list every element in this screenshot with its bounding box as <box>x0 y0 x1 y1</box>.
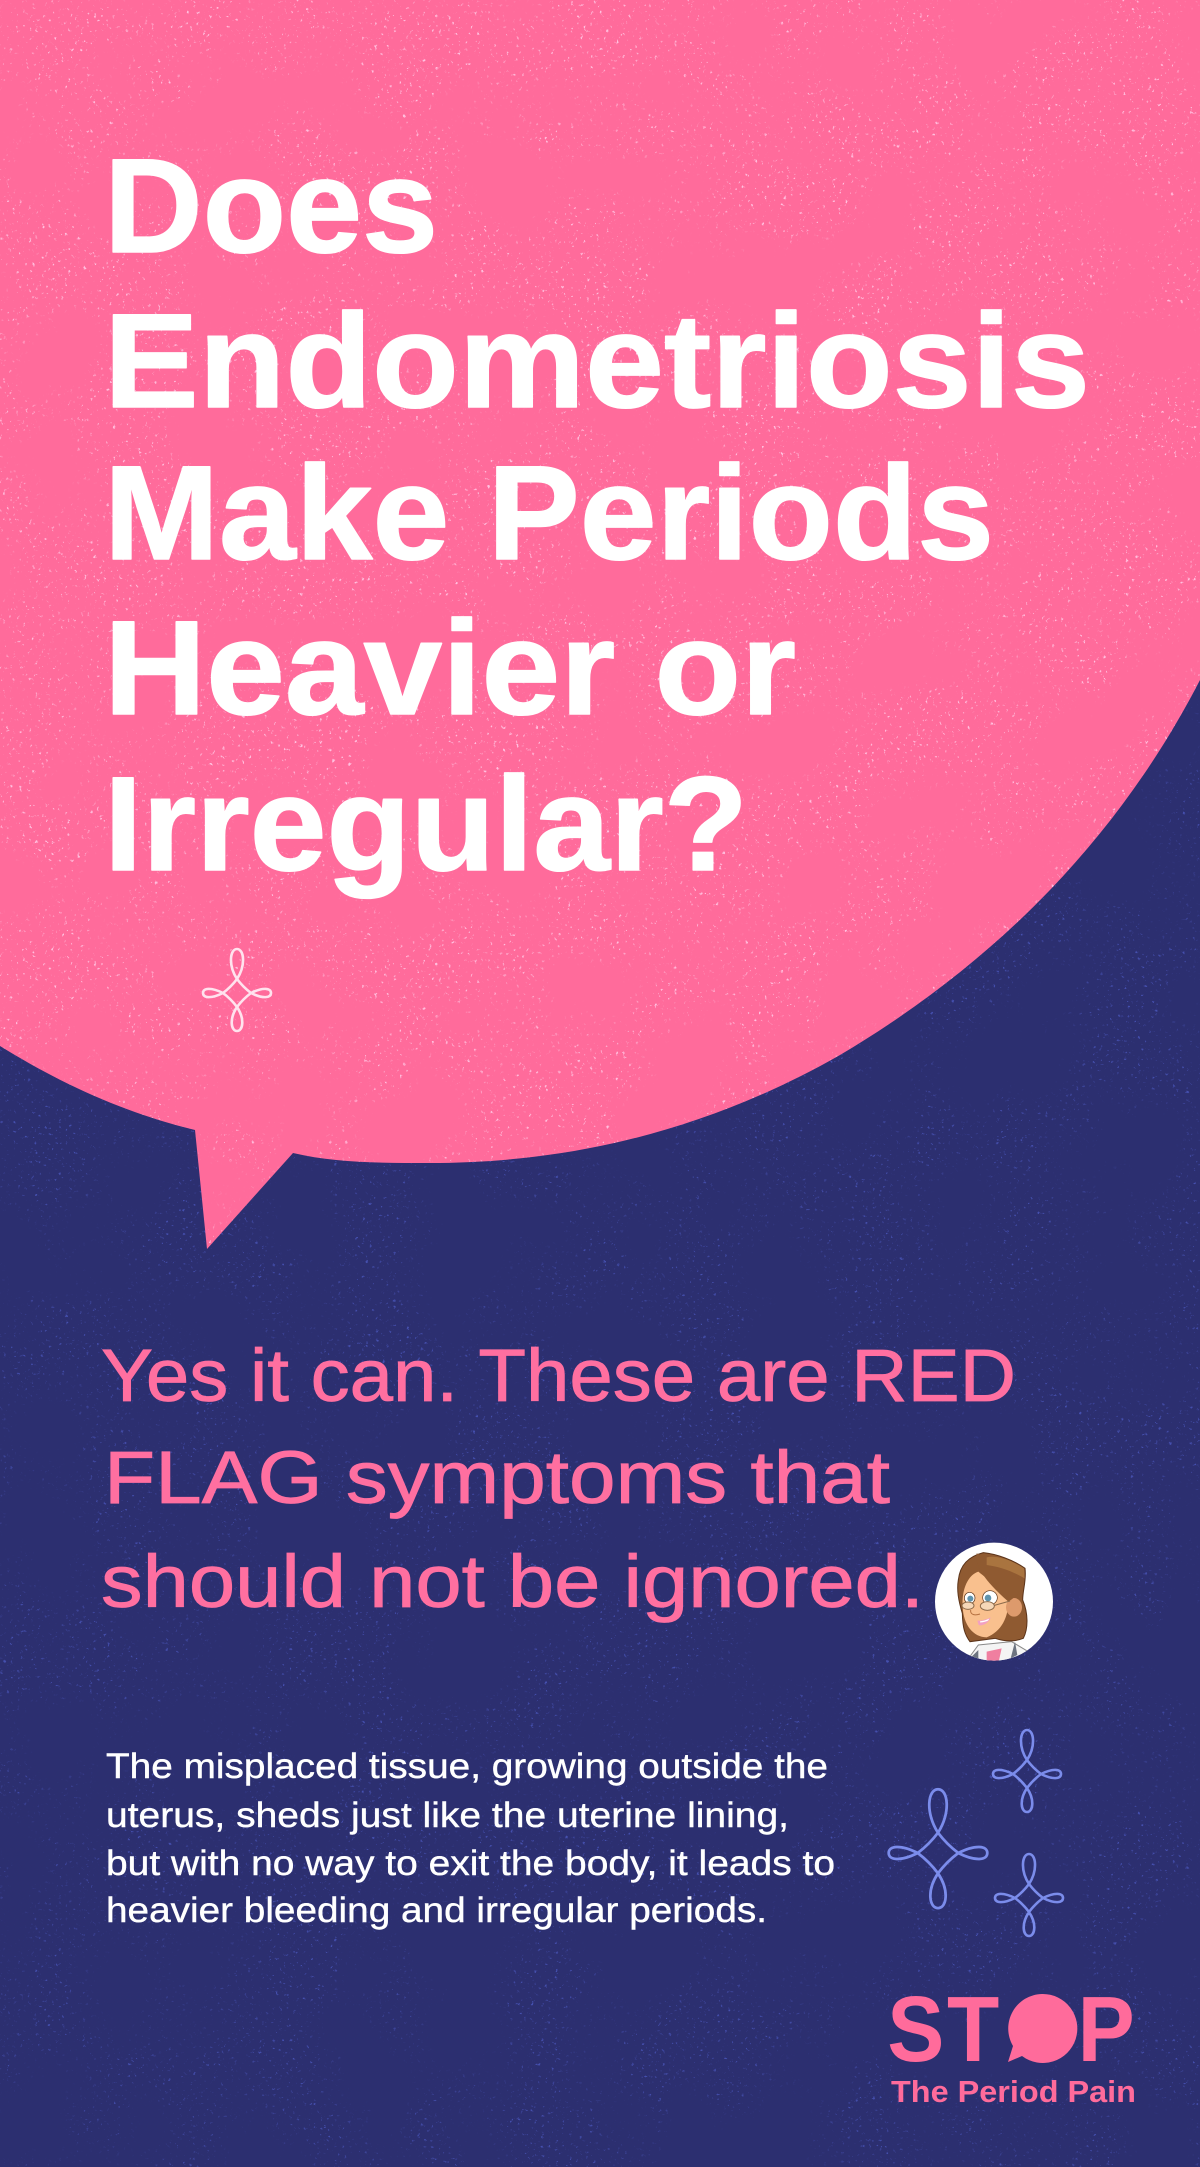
title: Make Periods <box>104 439 994 588</box>
title: Heavier or <box>104 594 796 743</box>
logo: Stop The Period Pain: STOP <box>887 1977 1135 2081</box>
body text: The misplaced tissue, growing outside the <box>106 1747 828 1786</box>
subheading: red flag answer: Yes it can. These are RED <box>101 1334 1016 1417</box>
logo: Stop The Period Pain: The Period Pain <box>891 2074 1136 2109</box>
body text: but with no way to exit the body, it leads to <box>106 1844 835 1883</box>
icon: speech bubble letter O <box>1008 1994 1077 2063</box>
title <box>104 132 1090 899</box>
icon: blue sparkles <box>889 1730 1063 1936</box>
body text <box>106 1747 835 1930</box>
subheading: red flag answer: FLAG symptoms that <box>104 1436 890 1519</box>
panel: pink speech bubble <box>0 0 1200 1260</box>
subheading: red flag answer <box>101 1334 1016 1623</box>
title: Does <box>104 132 438 281</box>
title: Endometriosis <box>104 287 1090 436</box>
icon: doctor avatar <box>935 1543 1053 1663</box>
icon: white sparkle on bubble <box>203 949 271 1031</box>
title: Irregular? <box>104 750 748 899</box>
body text: uterus, sheds just like the uterine lining, <box>106 1796 789 1835</box>
body text: heavier bleeding and irregular periods. <box>106 1891 767 1930</box>
subheading: red flag answer: should not be ignored. <box>101 1540 924 1623</box>
